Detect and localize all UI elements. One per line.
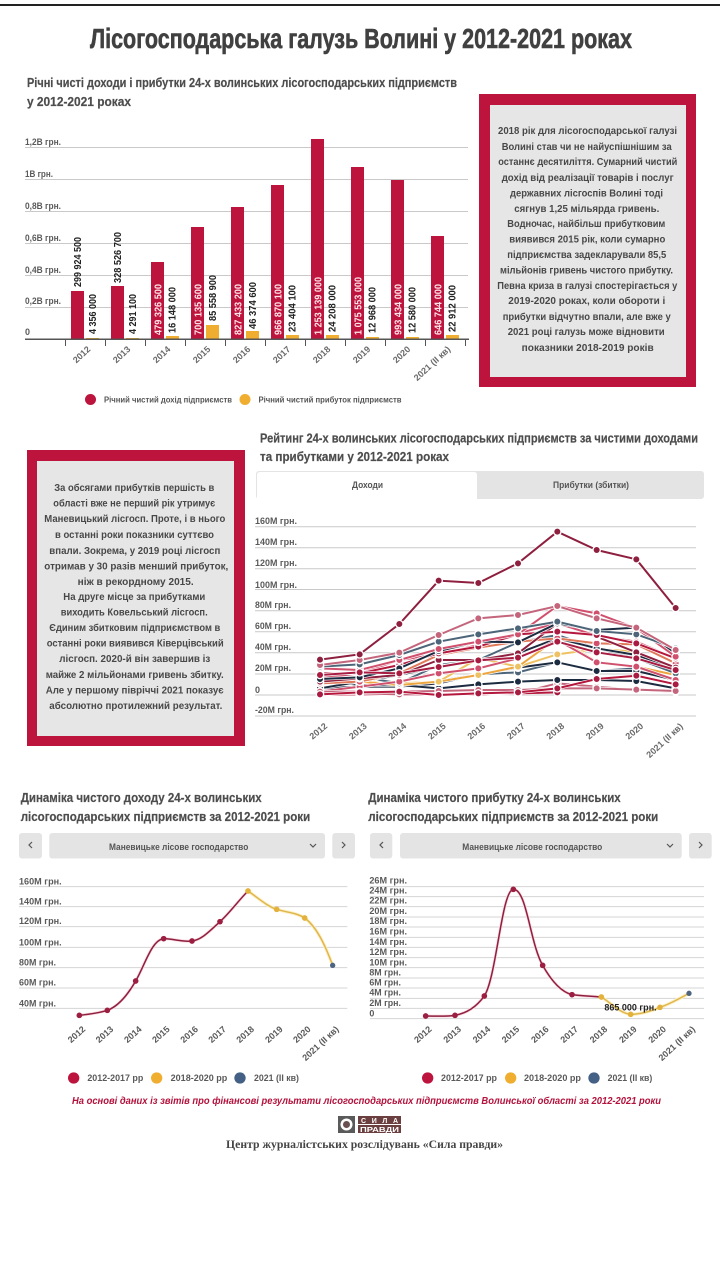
bar chart legend: Річний чистий дохід підприємств [104,396,232,404]
ranking y axis labels: 20M грн. [255,663,291,673]
ranking x labels: 2013 [347,721,369,741]
profit x labels: 2019 [617,1024,639,1045]
bar chart y axis labels: 0,8B грн. [25,201,61,211]
line chart: income dynamics [19,876,347,1084]
income y axis labels: 100M грн. [19,937,62,947]
panel: profit leaders [27,450,245,746]
company lines [320,606,676,695]
panel text: 2018 summary: Водночас, найбільш прибутковим [507,218,665,230]
top rule [0,4,720,6]
bar chart y axis labels: 1B грн. [25,169,53,179]
panel text: profit leaders: ніж в рекордному 2015. [78,577,194,588]
income x labels: 2015 [150,1024,172,1045]
profit x labels: 2014 [471,1024,492,1045]
income y axis labels: 60M грн. [19,977,56,987]
panel text: 2018 summary: останнє десятиліття. Сумарний чистий [498,157,677,168]
bar chart x labels: 2017 [271,344,292,365]
panel text: profit leaders: Маневицький лісгосп. Проте, і в нього [44,514,225,525]
organisation name: Центр журналістських розслідувань «Сила правди» [226,1139,503,1151]
profit x labels: 2020 [646,1024,668,1045]
profit y axis labels: 6M грн. [369,977,401,987]
heading: profit dynamics: лісогосподарських підприємств за 2012-2021 роки [368,809,658,824]
ranking x labels: 2017 [505,721,527,741]
panel text: 2018 summary: 2021 році галузь може відновити [508,327,665,338]
income y axis labels [19,876,62,1008]
income value labels [73,232,444,335]
income curve 2012-2018 [76,891,248,1018]
heading: income dynamics: Динаміка чистого доходу 24-х волинських [21,790,262,805]
bar chart x labels: 2019 [351,344,372,365]
panel: 2018 summary [479,94,696,387]
selector: income company [19,833,355,858]
profit legend [422,1072,652,1084]
profit value labels: 4 356 000 [88,294,99,334]
heading: income dynamics: лісогосподарських підприємств за 2012-2021 роки [21,809,310,824]
profit value labels: 85 558 900 [208,275,219,321]
ranking y axis labels: 80M грн. [255,600,291,610]
profit value labels: 16 148 000 [168,287,178,333]
panel text: 2018 summary [497,126,678,354]
panel text: profit leaders: абсолютно протилежний результат. [49,700,223,712]
profit value labels: 46 374 600 [248,282,259,329]
panel text: profit leaders: в останні роки показники суттєво [55,530,214,541]
line chart: company ranking [255,516,696,760]
ranking x labels: 2019 [584,721,606,741]
profit y axis labels: 8M грн. [369,968,401,978]
panel text: profit leaders [44,482,229,712]
ranking y axis labels: -20M грн. [255,705,294,715]
income x labels: 2012 [66,1024,87,1045]
bar chart y axis labels: 0,2B грн. [25,296,61,306]
heading: income dynamics [21,790,310,824]
profit x labels: 2016 [529,1024,551,1045]
panel text: profit leaders: майже 2 мільйонами гривень збитку. [46,669,224,681]
ranking y axis labels: 160M грн. [255,516,297,526]
income value labels: 993 434 000 [394,284,404,335]
profit legend: 2012-2017 рр [441,1073,497,1083]
panel text: profit leaders: лісгосп. 2020-й він завершив із [59,654,210,665]
ranking y axis labels: 40M грн. [255,642,291,652]
heading: annual income and profit [27,75,457,109]
profit value labels: 4 291 100 [128,294,139,334]
panel text: profit leaders: виходить Ковельський лісгосп. [61,608,208,618]
heading: ranking: та прибутками у 2012-2021 роках [260,449,450,464]
income legend [68,1072,299,1084]
panel text: profit leaders: області вже не перший рік утримує [53,498,216,510]
income x labels: 2018 [234,1024,256,1045]
panel text: profit leaders: За обсягами прибутків першість в [54,482,214,494]
ranking x labels: 2018 [545,721,566,741]
profit y axis labels: 12M грн. [369,947,407,957]
panel text: profit leaders: На друге місце за прибутками [63,591,205,603]
logo: Sila Pravdy: ПРАВДИ [360,1127,399,1134]
bar chart y axis labels: 1,2B грн. [25,137,61,147]
profit value labels: 23 404 100 [288,285,298,332]
panel text: 2018 summary: виявився 2015 рік, коли сумарно [509,234,665,246]
ranking y axis labels: 100M грн. [255,580,297,590]
profit legend: 2021 (II кв) [608,1073,652,1083]
bar chart y axis labels: 0,4B грн. [25,265,61,275]
profit y axis labels: 14M грн. [369,937,407,947]
selector: profit company: Маневицьке лісове господарство [462,842,603,852]
panel text: 2018 summary: Певна криза в галузі спостерігається у [497,281,678,292]
income value labels: 479 326 500 [154,284,164,335]
ranking y axis labels: 120M грн. [255,558,297,568]
ranking x labels [308,721,685,760]
income x labels: 2014 [122,1024,144,1045]
profit curve 2012-2018 [423,886,601,1019]
profit y axis labels: 20M грн. [369,906,407,916]
profit y axis labels: 2M грн. [369,998,401,1008]
line chart: profit dynamics [369,876,704,1084]
profit value labels: 12 580 000 [408,287,418,333]
income y axis labels: 40M грн. [19,998,56,1008]
income y axis labels: 80M грн. [19,958,56,968]
income value labels: 646 744 000 [434,284,444,335]
profit y axis labels: 10M грн. [369,957,407,967]
bar chart x labels: 2020 [391,344,412,365]
income x labels: 2020 [291,1024,313,1045]
bar chart y axis labels: 0 [25,327,30,337]
profit value labels: 12 968 000 [368,287,378,333]
profit y axis labels: 18M грн. [369,916,407,926]
panel text: 2018 summary: державних лісгоспів Волині тоді [510,188,663,200]
income legend: 2012-2017 рр [87,1073,144,1083]
tabs: Прибутки (збитки) [553,480,629,490]
heading: ranking [260,430,698,464]
panel text: 2018 summary: показники 2018-2019 років [522,343,654,354]
profit curve 2018-2021 [598,991,692,1017]
bar chart: annual income and profit [25,137,469,383]
ranking y axis labels: 60M грн. [255,621,291,631]
panel text: profit leaders: Єдиним збитковим підприємством в [49,622,220,634]
profit y axis labels: 26M грн. [369,876,407,886]
bar chart x labels: 2012 [71,344,92,365]
bar chart x labels: 2016 [231,344,252,365]
heading: profit dynamics [368,790,658,824]
profit value labels: 24 208 000 [328,285,338,332]
income y axis labels: 160M грн. [19,876,62,886]
profit x labels [412,1024,697,1063]
panel text: 2018 summary: Волині став чи не найуспішнішим за [502,142,672,153]
panel text: 2018 summary: 2019-2020 роках, коли обороти і [508,295,666,307]
income x labels: 2019 [263,1024,285,1045]
bar chart x labels: 2018 [311,344,332,365]
profit legend: 2018-2020 рр [524,1073,581,1083]
bar chart legend: Річний чистий прибуток підприємств [258,396,402,404]
tabs: Доходи [352,480,383,490]
bar chart x labels [71,344,452,383]
profit x labels: 2017 [558,1024,580,1045]
profit y axis labels: 22M грн. [369,896,407,906]
leader line: Manevychi forestry [320,532,676,660]
income curve 2018-2020 [245,888,335,968]
panel text: 2018 summary: сягнув 1,25 мільярда гривень. [514,204,660,215]
bar chart x labels: 2015 [191,344,212,365]
profit x labels: 2013 [441,1024,463,1045]
ranking x labels: 2014 [387,721,408,741]
profit x labels: 2015 [500,1024,521,1045]
heading: annual income and profit: Річні чисті доходи і прибутки 24-х волинських лісогосподарських підприємств [27,75,457,90]
profit y axis labels: 4M грн. [369,987,401,997]
income x labels: 2016 [178,1024,200,1045]
income value labels: 1 253 139 000 [314,277,324,335]
profit x labels: 2018 [588,1024,609,1045]
profit x labels: 2012 [412,1024,434,1045]
panel text: 2018 summary: 2018 рік для лісогосподарської галузі [498,126,677,137]
income value labels: 1 075 553 000 [354,277,364,335]
panel text: profit leaders: останні роки виявився Ківерцівський [47,638,224,650]
income value labels: 700 135 600 [194,284,204,335]
ranking x labels: 2021 (II кв) [644,721,685,760]
panel text: 2018 summary: дохід від реалізації товарів і послуг [502,173,674,184]
panel text: profit leaders: Але у першому півріччі 2021 показує [46,686,224,696]
heading: annual income and profit: у 2012-2021 роках [27,94,132,109]
income x labels: 2021 (II кв) [300,1024,341,1063]
panel text: profit leaders: впали. Зокрема, у 2019 році лісгосп [49,546,220,557]
bar chart x labels: 2021 (II кв) [412,344,452,383]
source note: На основі даних із звітів про фінансові результати лісогосподарських підприємств Волинської області за 2012-2021 роки [72,1095,661,1107]
income value labels: 328 526 700 [113,232,124,283]
ranking x labels: 2020 [624,721,645,741]
panel text: 2018 summary: мільйонів гривень чистого прибутку. [500,264,673,276]
profit y axis labels [369,876,407,1018]
logo: Sila Pravdy: СИЛА [361,1118,398,1125]
selector: income company: Маневицьке лісове господарство [109,842,249,852]
income y axis labels: 140M грн. [19,896,62,906]
income x labels: 2013 [94,1024,115,1045]
income value labels: 299 924 500 [73,237,84,287]
bar chart legend [85,394,402,405]
ranking y axis labels: 0 [255,685,260,695]
income y axis labels: 120M грн. [19,916,62,926]
bar chart x labels: 2013 [111,344,132,365]
profit value labels [88,275,458,334]
income legend: 2021 (II кв) [254,1073,299,1083]
ranking x labels: 2012 [308,721,329,741]
bar chart y axis labels [25,137,61,337]
profit y axis labels: 0 [369,1008,374,1018]
tabs [256,471,704,499]
selector: profit company [370,833,712,858]
ranking y axis labels [255,516,297,715]
profit y axis labels: 24M грн. [369,886,407,896]
income value labels: 827 433 200 [234,284,244,335]
ranking y axis labels: 140M грн. [255,537,297,547]
income value labels: 966 870 100 [274,284,284,335]
profit y axis labels: 16M грн. [369,926,407,936]
income bars [71,139,444,339]
profit value labels: 22 912 000 [448,285,458,332]
bar chart y axis labels: 0,6B грн. [25,233,61,243]
ranking x labels: 2015 [426,721,448,741]
income x labels [66,1024,341,1063]
profit bars [86,325,459,339]
profit x labels: 2021 (II кв) [657,1024,697,1063]
income x labels: 2017 [206,1024,228,1045]
x axis [25,338,469,346]
bar chart x labels: 2014 [151,344,172,365]
panel text: 2018 summary: прибутки відчутно впали, але вже у [503,311,671,323]
income legend: 2018-2020 рр [171,1073,228,1083]
logo: Sila Pravdy [338,1116,401,1134]
callout: 2019 profit value: 865 000 грн. [604,1002,657,1012]
ranking x labels: 2016 [466,721,487,741]
heading: profit dynamics: Динаміка чистого прибутку 24-х волинських [368,790,621,805]
panel text: 2018 summary: підприємства задекларували 85,5 [507,250,667,261]
panel text: profit leaders: отримав у 30 разів менший прибуток, [44,560,229,572]
